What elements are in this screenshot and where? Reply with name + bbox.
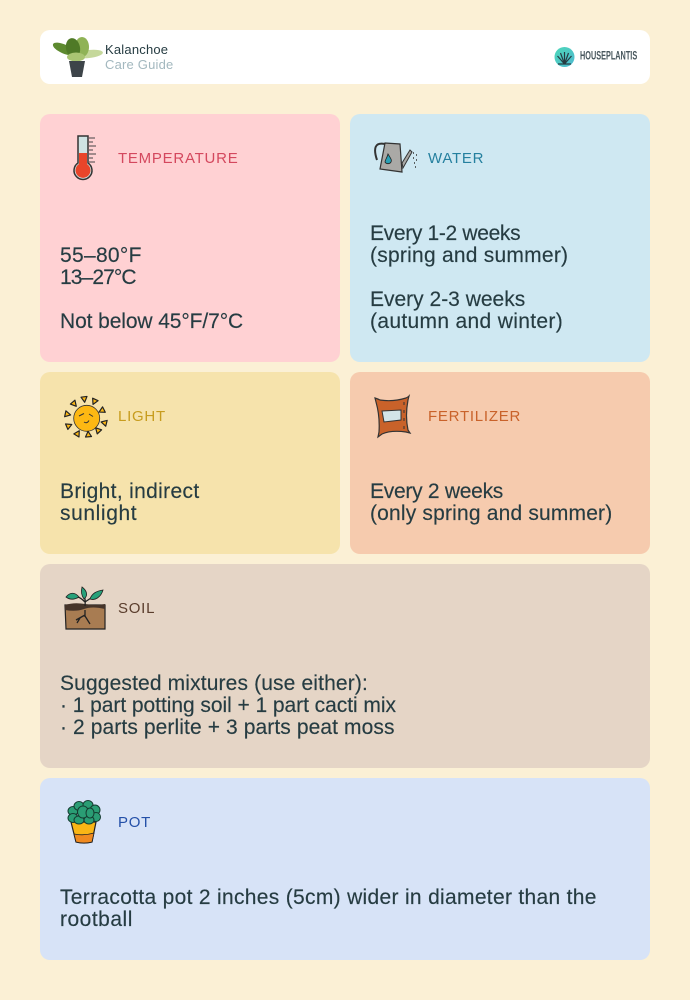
temperature text bbox=[60, 244, 243, 333]
water text: Every 2-3 weeks bbox=[370, 288, 525, 311]
icon: sun bbox=[64, 396, 108, 438]
water text bbox=[370, 222, 568, 333]
heading: soil: SOIL bbox=[118, 600, 155, 617]
light text bbox=[60, 480, 200, 525]
fertilizer text: (only spring and summer) bbox=[370, 502, 612, 525]
heading: temperature: TEMPERATURE bbox=[118, 150, 238, 167]
panel: light bbox=[40, 372, 340, 554]
pot text: Terracotta pot 2 inches (5cm) wider in diameter than the bbox=[60, 886, 597, 909]
icon: seedling in soil bbox=[64, 586, 106, 630]
water text: Every 1-2 weeks bbox=[370, 222, 520, 245]
panel: fertilizer bbox=[350, 372, 650, 554]
header bar bbox=[40, 30, 650, 84]
temperature text: Not below 45°F/7°C bbox=[60, 310, 243, 333]
soil text: · 2 parts perlite + 3 parts peat moss bbox=[60, 716, 395, 739]
panel: soil bbox=[40, 564, 650, 768]
light text: sunlight bbox=[60, 502, 137, 525]
soil text: · 1 part potting soil + 1 part cacti mix bbox=[60, 694, 396, 717]
fertilizer text: Every 2 weeks bbox=[370, 480, 503, 503]
pot text bbox=[60, 886, 597, 931]
icon: fertilizer bag bbox=[374, 394, 412, 438]
panel: temperature bbox=[40, 114, 340, 362]
logo: houseplantis bbox=[554, 47, 637, 67]
light text: Bright, indirect bbox=[60, 480, 200, 503]
heading: water: WATER bbox=[428, 150, 484, 167]
panel: pot bbox=[40, 778, 650, 960]
title: Care Guide bbox=[105, 57, 173, 72]
pot text: rootball bbox=[60, 908, 133, 931]
icon: thermometer bbox=[73, 135, 96, 180]
temperature text: 55–80°F bbox=[60, 244, 142, 267]
water text: (spring and summer) bbox=[370, 244, 568, 267]
heading: fertilizer: FERTILIZER bbox=[428, 408, 521, 425]
soil text bbox=[60, 672, 396, 739]
title bbox=[105, 42, 173, 72]
heading: light: LIGHT bbox=[118, 408, 166, 425]
icon: kalanchoe plant bbox=[52, 37, 103, 77]
temperature text: 13–27°C bbox=[60, 266, 136, 289]
water text: (autumn and winter) bbox=[370, 310, 563, 333]
logo: houseplantis: HOUSEPLANTIS bbox=[580, 50, 637, 63]
icon: watering can bbox=[374, 142, 417, 173]
panel: water bbox=[350, 114, 650, 362]
heading: pot: POT bbox=[118, 814, 151, 831]
soil text: Suggested mixtures (use either): bbox=[60, 672, 368, 695]
fertilizer text bbox=[370, 480, 612, 525]
title: Kalanchoe bbox=[105, 42, 168, 57]
icon: potted plant bbox=[68, 800, 101, 844]
